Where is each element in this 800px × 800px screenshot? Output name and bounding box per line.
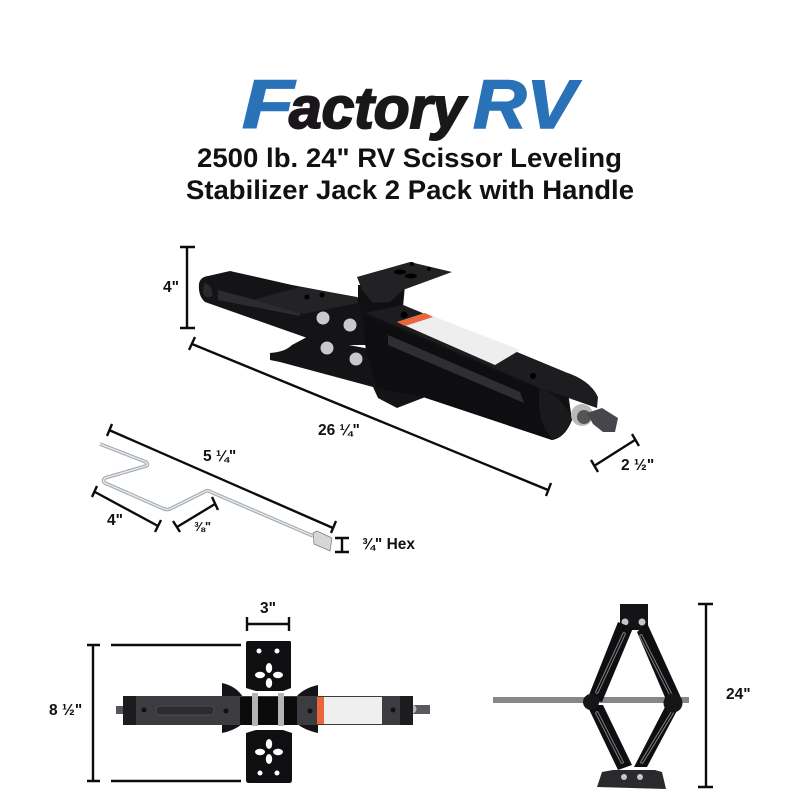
dimension: 2 1/2 inch: 2 ½" <box>621 457 654 474</box>
dimension: handle 3/8 inch <box>173 497 218 534</box>
main bar <box>123 696 413 725</box>
logo: Factory RV: RV <box>473 66 581 143</box>
dimension: 3 inch plate width <box>247 600 289 631</box>
upper mounting plate <box>357 262 452 303</box>
right arm top face <box>366 305 598 408</box>
dimension: 3/4 inch hex: ¾" Hex <box>362 536 415 553</box>
pivots <box>583 694 599 710</box>
top plate <box>246 641 291 691</box>
top view jack <box>116 641 430 783</box>
dimension: 8 1/2 inch <box>49 645 241 781</box>
left arm <box>199 271 372 345</box>
dimension: 4 inch height <box>163 247 195 328</box>
arms <box>587 622 682 770</box>
dimension: 24 inch height: 24" <box>726 686 751 703</box>
dimension: 26 1/4 inch length: 26 ¼" <box>318 422 360 439</box>
center post under upper plate <box>358 285 405 316</box>
threaded rod <box>493 697 689 703</box>
title: Stabilizer Jack 2 Pack with Handle <box>186 175 634 205</box>
hex socket <box>313 531 332 551</box>
right arm backing <box>360 305 572 440</box>
main scissor jack photo <box>199 262 618 440</box>
dimension: handle 5 1/4 inch <box>107 424 336 533</box>
shaft ends <box>116 706 126 714</box>
bottom plate <box>246 730 292 783</box>
dimension: 26 1/4 inch length <box>189 337 551 496</box>
dimension: handle 5 1/4 inch: 5 ¼" <box>203 448 236 465</box>
warning label <box>397 313 520 365</box>
dimension: 2 1/2 inch <box>591 434 654 474</box>
dimension: 4 inch height: 4" <box>163 279 179 296</box>
title <box>186 143 634 205</box>
foot bracket <box>270 337 428 408</box>
warning label <box>317 697 382 724</box>
hex bolt and washer <box>571 404 593 426</box>
logo: Factory RV: actory <box>289 76 468 141</box>
bolts <box>316 312 330 324</box>
dimension: 3/4 inch hex <box>335 536 415 553</box>
dimension: handle 4 inch: 4" <box>107 512 123 529</box>
dimension: 8 1/2 inch: 8 ½" <box>49 702 82 719</box>
dimension: 3 inch plate width: 3" <box>260 600 276 617</box>
center hinge <box>240 697 297 725</box>
title: 2500 lb. 24" RV Scissor Leveling <box>197 143 622 173</box>
dimension: handle 3/8 inch: ⅜" <box>194 519 211 534</box>
left mounting plate <box>253 287 358 314</box>
logo: Factory RV: F <box>242 66 296 143</box>
right arm side face <box>364 316 572 440</box>
dimension: handle 4 inch <box>92 486 161 532</box>
dimension: 24 inch height <box>698 604 751 787</box>
wings <box>222 683 318 733</box>
crank handle <box>100 444 332 551</box>
logo: Factory RV <box>242 66 581 143</box>
top bracket <box>620 604 648 630</box>
side view scissor jack <box>493 604 689 789</box>
base <box>597 770 666 789</box>
